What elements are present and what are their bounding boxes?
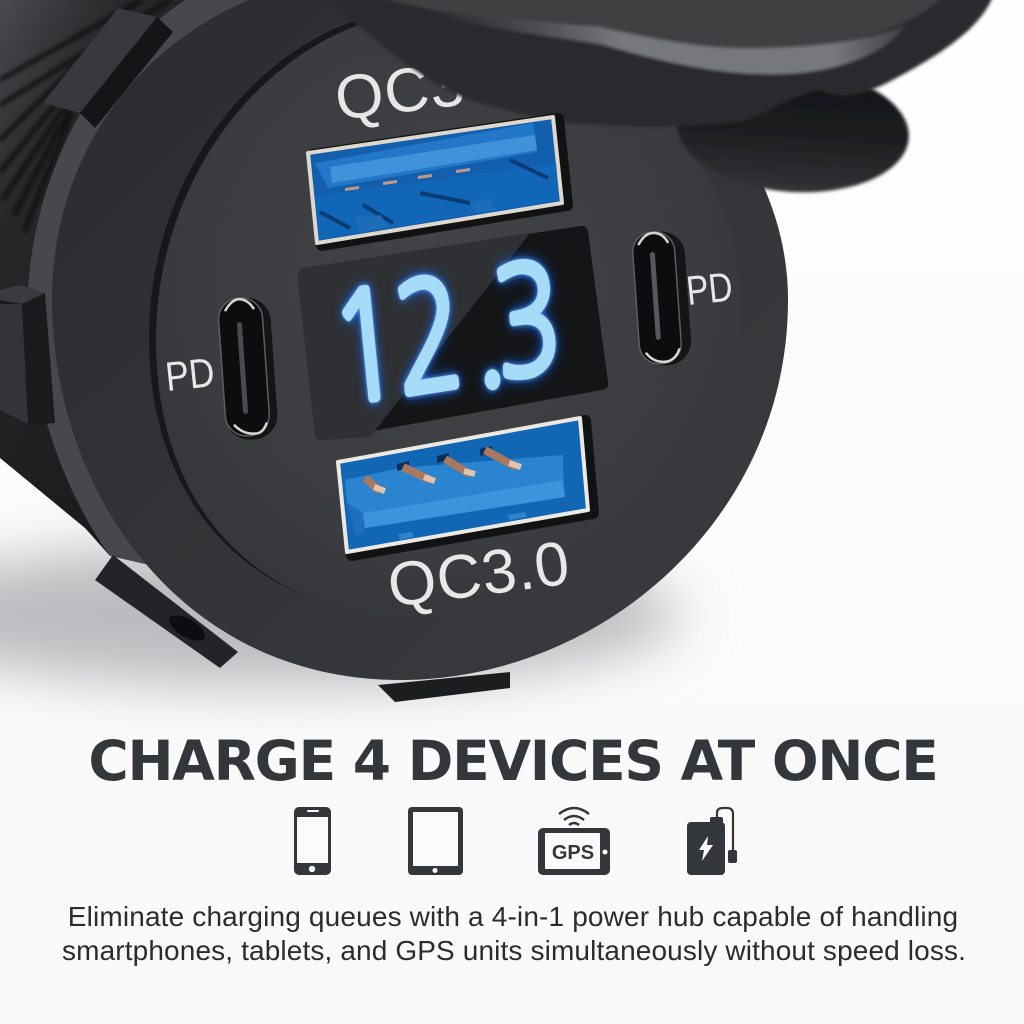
- description text: [62, 901, 966, 966]
- tab: upper left: [43, 8, 173, 128]
- icon: GPS device: [538, 808, 610, 875]
- floor shadow: [0, 543, 680, 687]
- LED readout: 12.3: [325, 243, 568, 427]
- left USB-C port: [217, 296, 279, 441]
- left PD label: PD: [163, 349, 217, 400]
- icon: smartphone: [294, 807, 331, 875]
- top QC label: QC3: [331, 50, 469, 134]
- cap: [320, 0, 995, 126]
- tab: left: [0, 285, 55, 425]
- face groove: [149, 7, 733, 619]
- display: [298, 226, 608, 440]
- icon: tablet: [408, 807, 463, 875]
- description text: Eliminate charging queues with a 4-in-1 power hub capable of handling: [68, 901, 958, 932]
- threaded cylinder: [0, 0, 300, 556]
- face plate: [156, 10, 740, 622]
- collar ring: [28, 0, 300, 600]
- bottom USB port: [338, 418, 593, 555]
- right USB-C port: [631, 230, 693, 367]
- icon: GPS device: GPS: [552, 842, 594, 864]
- bottom QC3.0 label: QC3.0: [384, 529, 574, 621]
- description text: smartphones, tablets, and GPS units simultaneously without speed loss.: [62, 935, 966, 966]
- outer flange: [52, 0, 788, 680]
- top USB port: [308, 117, 567, 245]
- tab: lower left: [95, 555, 238, 668]
- icon: power bank: [687, 808, 737, 875]
- cap flap: [673, 60, 913, 200]
- tab: bottom: [378, 672, 510, 702]
- title: CHARGE 4 DEVICES AT ONCE: [88, 729, 938, 793]
- right PD label: PD: [684, 263, 735, 314]
